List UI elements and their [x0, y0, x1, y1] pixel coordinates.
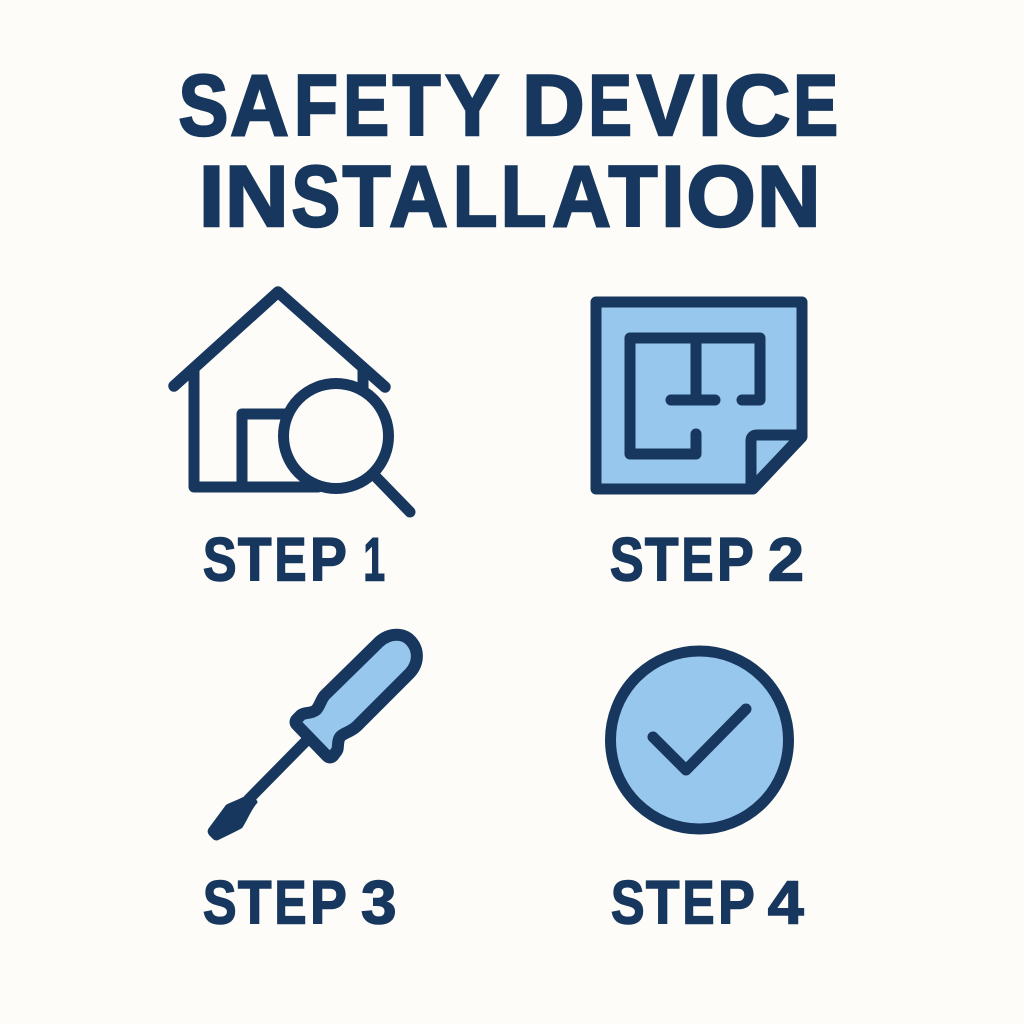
title: E: [793, 58, 838, 154]
icon: check mark in circle: [610, 651, 788, 829]
title: A: [230, 58, 289, 154]
icon: house with magnifying glass: [174, 292, 410, 512]
label: step 4: P: [718, 868, 755, 936]
title: T: [393, 58, 440, 154]
title: A: [552, 149, 611, 245]
label: step 2: S: [610, 526, 644, 594]
label: step 1: P: [310, 526, 347, 594]
title: N: [225, 149, 289, 245]
title: V: [637, 58, 694, 154]
title: Y: [445, 58, 499, 154]
label: step 3: S: [203, 868, 237, 936]
label: step 3: P: [310, 868, 347, 936]
screwdriver shaft: [248, 738, 309, 800]
title: C: [724, 58, 790, 154]
label: step 1: E: [275, 526, 307, 594]
label: step 4: E: [683, 868, 715, 936]
title: [178, 58, 838, 245]
title: F: [294, 58, 338, 154]
label: step 2: 2: [768, 526, 804, 594]
icon: floor plan: [596, 302, 802, 489]
label: step 1: S: [203, 526, 237, 594]
title: S: [292, 149, 340, 245]
title: O: [686, 149, 756, 245]
title: N: [757, 149, 821, 245]
screwdriver blade: [209, 794, 256, 839]
title: L: [501, 149, 546, 245]
label: step 3: T: [238, 868, 271, 936]
title: T: [343, 149, 391, 245]
title: I: [199, 149, 224, 245]
label: step 2: E: [682, 526, 714, 594]
label: step 3: E: [275, 868, 307, 936]
screwdriver handle: [296, 635, 417, 758]
title: E: [588, 58, 632, 154]
label: step 4: 4: [768, 868, 804, 936]
title: D: [522, 58, 585, 154]
label: step 3: 3: [361, 868, 397, 936]
title: I: [661, 149, 685, 245]
title: T: [608, 149, 658, 245]
label: step 1: 1: [363, 526, 385, 594]
title: L: [453, 149, 497, 245]
title: I: [698, 58, 722, 154]
icon: screwdriver: [209, 635, 417, 839]
label: step 2: P: [717, 526, 754, 594]
label: step 1: T: [238, 526, 271, 594]
label: step 4: S: [611, 868, 645, 936]
title: A: [389, 149, 448, 245]
title: E: [343, 58, 389, 154]
title: S: [178, 58, 228, 154]
label: step 2: T: [645, 526, 678, 594]
label: step 4: T: [646, 868, 679, 936]
